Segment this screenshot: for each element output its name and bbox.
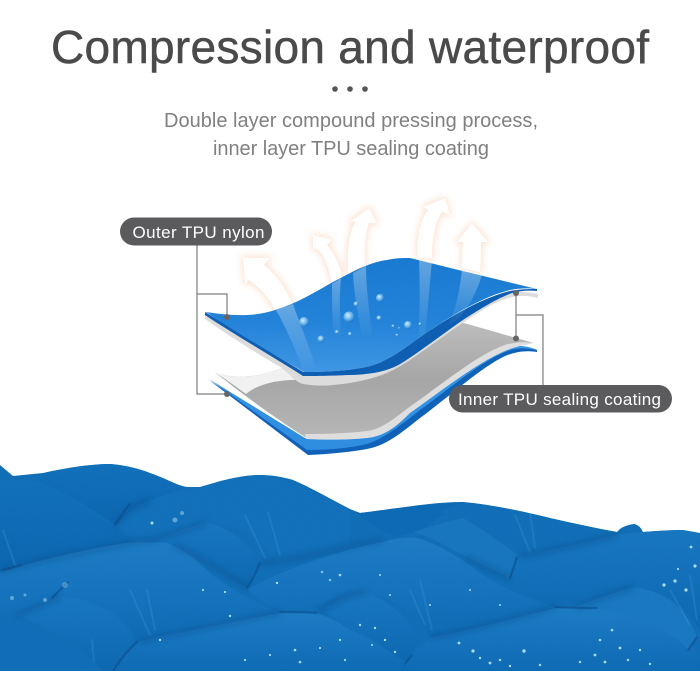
subtitle: inner layer TPU sealing coating <box>213 138 489 160</box>
pillow: back centre right <box>418 521 490 537</box>
connector: outer TPU nylon <box>197 245 230 397</box>
water beads <box>10 511 697 667</box>
pillow: bottom left corner <box>0 617 103 671</box>
light underlayer of top sheet <box>205 292 538 386</box>
pillow: right <box>610 530 700 542</box>
fabric weave on top sheet <box>206 258 537 372</box>
pillow: big centre <box>268 538 491 580</box>
dark creases <box>3 504 697 671</box>
mattress base <box>0 460 700 672</box>
subtitle: Double layer compound pressing process, <box>164 110 538 132</box>
pillow: lower right <box>574 588 696 644</box>
label: inner TPU sealing coating <box>449 385 672 412</box>
three dots divider <box>332 86 368 92</box>
pillow: far back right <box>463 502 616 532</box>
pillow: small centre <box>200 522 223 530</box>
pillow: bottom centre <box>182 613 366 638</box>
pillow: far back centre <box>356 502 462 513</box>
pillow: lower left <box>54 597 96 606</box>
water droplets <box>299 294 422 342</box>
icon: vapour arrows rising from the fabric <box>243 198 488 312</box>
top blue sheet <box>205 258 537 376</box>
air mattress photo <box>0 460 700 672</box>
fabric weave texture <box>20 466 641 622</box>
soft seam shadows <box>0 500 633 642</box>
pillow: back left <box>88 464 186 523</box>
light streaks on fabric <box>276 304 316 370</box>
subtitle <box>164 110 538 160</box>
pillow: upper centre <box>200 475 265 487</box>
pillow: front right <box>470 608 667 634</box>
label: inner TPU sealing coating: Inner TPU sealing coating <box>458 390 661 409</box>
layered fabric diagram <box>205 258 538 455</box>
fabric wrinkles <box>3 512 697 662</box>
pillow: lower centre lobe <box>350 594 384 602</box>
pillow: large centre left <box>0 542 225 584</box>
lower blue sheet <box>209 346 537 455</box>
label: outer TPU nylon: Outer TPU nylon <box>132 223 264 242</box>
label: outer TPU nylon <box>120 218 272 246</box>
pillow: upper left <box>0 564 6 567</box>
dark edge of top sheet <box>205 289 537 376</box>
title: Compression and waterproof <box>51 21 649 73</box>
grey inner coating <box>215 322 534 440</box>
connector: inner TPU sealing coating <box>513 290 543 385</box>
